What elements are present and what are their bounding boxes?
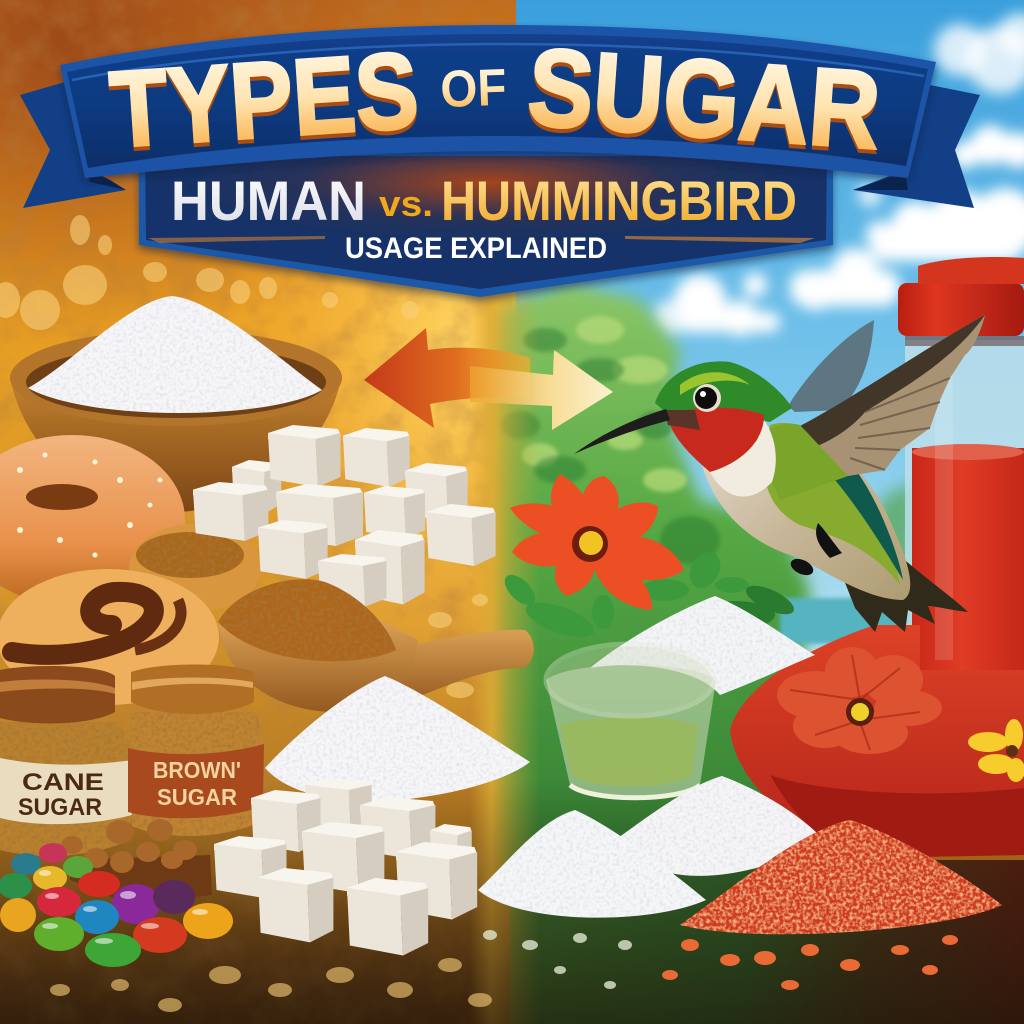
banner ribbon tails	[20, 82, 980, 208]
main title banner	[60, 25, 936, 178]
background: foliage	[495, 282, 914, 900]
jar: brown sugar: SUGAR	[157, 784, 237, 810]
bottom stack of sugar cubes	[214, 778, 477, 956]
subtitle: human vs. hummingbird: vs.	[379, 183, 433, 224]
title text: SUGAR	[524, 29, 884, 176]
subtitle: human vs. hummingbird: HUMAN	[171, 169, 366, 232]
spoon of brown sugar	[218, 579, 534, 712]
arrow: right toward hummingbird	[470, 350, 613, 430]
hummingbird	[574, 315, 985, 632]
background: warm human side	[0, 0, 516, 1024]
cinnamon roll	[0, 569, 219, 705]
yellow flower	[968, 719, 1024, 782]
title text: TYPES	[107, 33, 422, 174]
decorative bokeh dots	[0, 215, 492, 1012]
red flower and leaves	[499, 474, 798, 645]
glass of sugar water	[546, 644, 716, 798]
arrow: left toward human	[364, 328, 530, 428]
title text: OF	[439, 59, 507, 119]
title text: TYPES	[107, 29, 422, 170]
background: ground and seam	[0, 290, 1024, 1024]
sub-banner plaque	[139, 150, 833, 297]
small pastry	[129, 524, 261, 612]
red sugar pile	[680, 820, 1002, 934]
hummingbird sugar pile upper	[590, 596, 815, 695]
feeder: reservoir and cap	[898, 257, 1024, 680]
title text	[107, 25, 884, 176]
top stack of sugar cubes	[193, 425, 496, 607]
background: sky and foliage hummingbird side	[516, 0, 1024, 660]
subtitle: human vs. hummingbird	[171, 169, 797, 232]
flower on feeder	[777, 647, 942, 754]
bowl of white sugar	[10, 296, 342, 512]
feeder: base tray	[730, 625, 1024, 858]
white sugar pile right	[615, 776, 822, 876]
centre pile of white sugar	[265, 676, 530, 802]
tagline: usage explained: USAGE EXPLAINED	[345, 232, 607, 265]
white sugar pile left	[478, 810, 706, 918]
subtitle: human vs. hummingbird: HUMMINGBIRD	[441, 169, 797, 232]
jar: cane sugar	[0, 666, 133, 856]
glazed donut	[0, 435, 185, 605]
jar: brown sugar	[128, 664, 264, 836]
jar: cane sugar: SUGAR	[18, 794, 102, 821]
jar: cane sugar: CANE	[22, 769, 104, 796]
bowl of nuts	[61, 819, 212, 905]
colourful candies	[0, 843, 233, 967]
jar: brown sugar: BROWN'	[153, 757, 241, 783]
scattered crystals	[662, 935, 958, 990]
title text: SUGAR	[524, 25, 884, 172]
